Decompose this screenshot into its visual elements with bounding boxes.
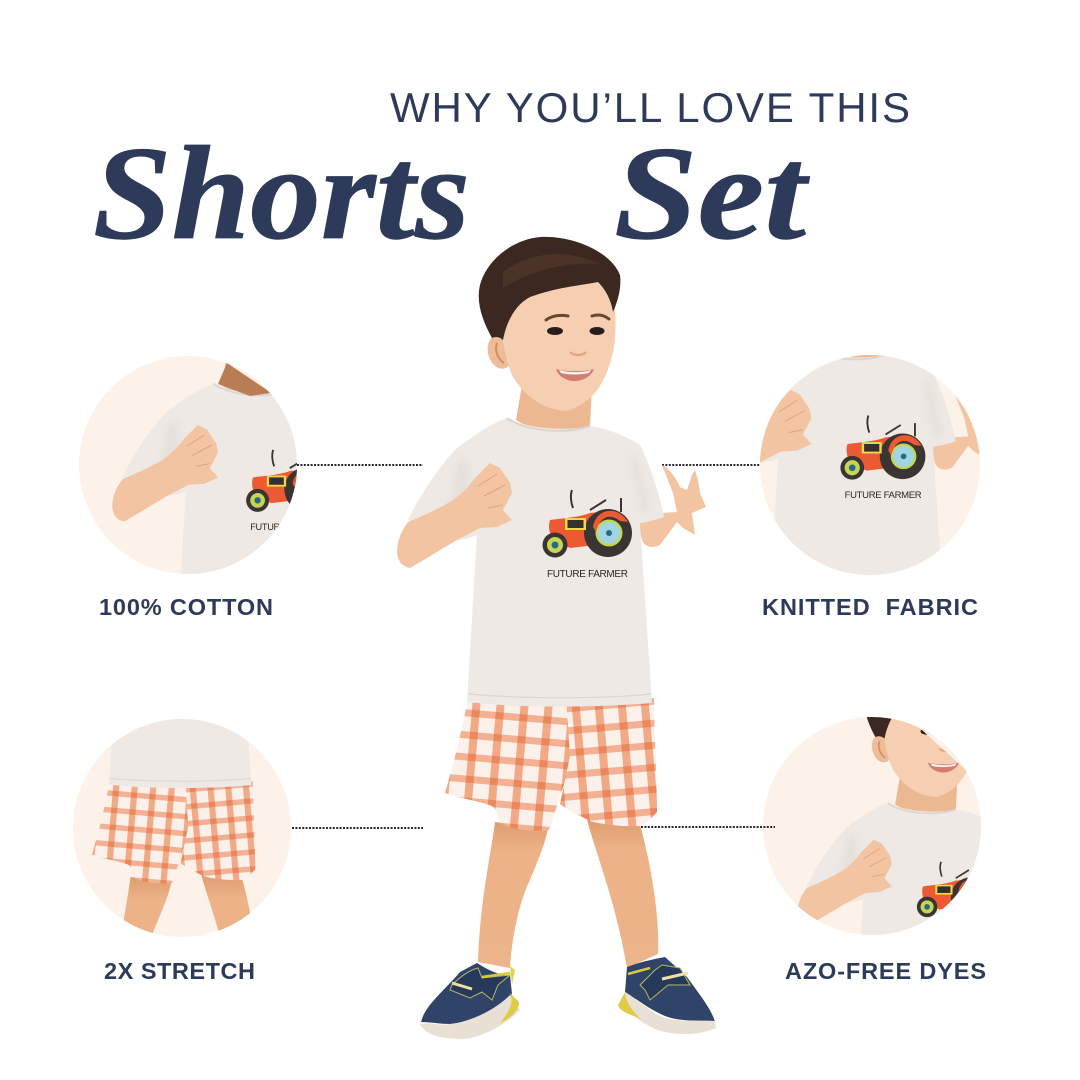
circle: knitted fabric detail — [760, 355, 980, 575]
finger lines — [478, 474, 505, 508]
eyes — [547, 327, 604, 335]
legs — [478, 820, 658, 968]
label: 2x stretch: 2X STRETCH — [104, 958, 255, 984]
boy figure — [397, 237, 716, 1039]
label: azo-free dyes: AZO-FREE DYES — [785, 958, 986, 984]
circle: 2x stretch detail — [92, 719, 256, 933]
dotted connector lines — [292, 465, 775, 828]
lower body — [420, 698, 716, 1039]
title: shorts set — [93, 119, 810, 267]
nose — [570, 352, 586, 355]
shoe right — [618, 957, 716, 1034]
shirt hem line — [469, 694, 651, 698]
label: knitted fabric: KNITTED FABRIC — [762, 594, 978, 620]
shirt shading — [450, 450, 650, 530]
circle: 100% cotton detail — [112, 362, 297, 574]
t-shirt — [408, 418, 664, 707]
circle backgrounds — [73, 355, 981, 937]
right arm and hand — [638, 465, 706, 547]
neck — [516, 385, 592, 432]
eyebrows — [546, 315, 609, 320]
shirt collar — [507, 418, 590, 431]
face — [501, 270, 616, 411]
upper body — [397, 237, 706, 707]
circle: azo-free dyes detail — [798, 717, 981, 935]
ear — [484, 332, 516, 372]
subtitle: why you'll love this: WHY YOU’LL LOVE THIS — [390, 84, 910, 131]
title: shorts set: Set — [614, 119, 810, 267]
label: 100% cotton: 100% COTTON — [99, 594, 273, 620]
shoe left — [420, 963, 520, 1039]
title: shorts set: Shorts — [93, 119, 470, 267]
shorts — [445, 698, 657, 831]
hair highlight — [503, 254, 600, 288]
shirt print text: FUTURE FARMER — [547, 569, 628, 580]
mouth — [556, 369, 594, 381]
left arm and hand — [397, 463, 512, 568]
hair — [479, 237, 620, 340]
tractor print — [542, 490, 632, 558]
